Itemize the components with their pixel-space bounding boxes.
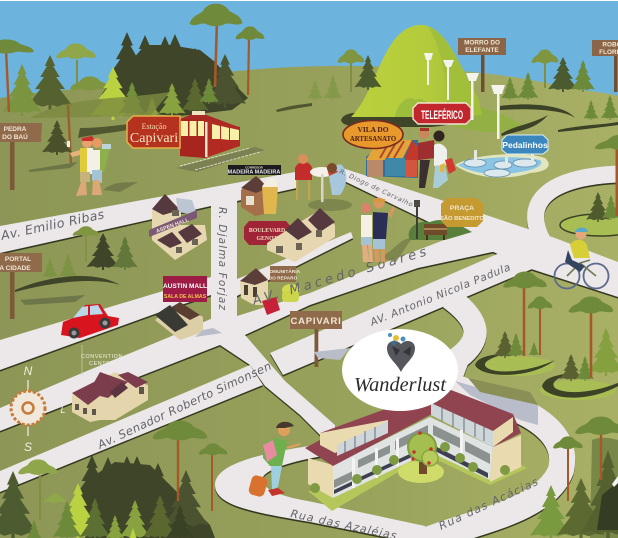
building: Comunitas (240, 266, 301, 315)
sign: Capivari: CAPIVARI (290, 316, 342, 327)
road label: Av. Antonio Nicola Padula: AV. Antonio Nicola Padula (368, 261, 512, 329)
sky (0, 1, 618, 121)
sign: Pedra do Baú (0, 123, 42, 190)
sign: Portal da Cidade: A CIDADE (0, 265, 31, 272)
sign: Teleférico: TELEFÉRICO (421, 107, 463, 122)
sign: Boulevard Genot: GENOT (257, 236, 278, 242)
compass rose: S (24, 440, 32, 454)
sign: Pedra do Baú: DO BAÚ (2, 132, 28, 141)
market stall: Vila do Artesanato (366, 140, 420, 178)
traveller with suitcase (248, 422, 300, 498)
far trees: top right (308, 49, 618, 136)
sign: Estação Capivari: Estação (142, 122, 166, 131)
roads (0, 165, 618, 538)
building: Aspen Hall (149, 194, 207, 260)
sign: Vila do Artesanato: ARTESANATO (350, 136, 396, 143)
green patch with lamp and bench (409, 200, 472, 240)
sign: Madeira Madeira: MADEIRA MADEIRA (228, 170, 280, 176)
forest: bottom right (530, 416, 618, 538)
sign: Pedalinhos (502, 135, 548, 154)
right hill with trees (560, 134, 618, 236)
icon: heart balloon (387, 333, 415, 372)
building: brick with beer mug (241, 176, 278, 216)
building: Comunitas: COMUNITÁRIA (266, 268, 301, 275)
logo: Wanderlust white ellipse (342, 329, 458, 411)
label: Convention Center (81, 345, 123, 375)
sign: Morro do Elefante: MORRO DO (464, 40, 500, 46)
sign: Vila do Artesanato (343, 120, 403, 148)
compass rose (11, 364, 66, 454)
hotel building (305, 390, 527, 511)
sign: Estação Capivari: Capivari (130, 131, 178, 146)
building: Convention Center (72, 372, 148, 422)
road label: Av. Macedo Soares: AV. Macedo Soares (250, 245, 428, 309)
forest: bottom left (0, 421, 227, 538)
couple taking a selfie (67, 136, 138, 196)
lake with pedal boats (455, 150, 549, 178)
small trees: between roads left (15, 226, 138, 305)
small fir with shadow (28, 105, 78, 172)
cyclist (554, 228, 608, 288)
sign: Pedra do Baú: PEDRA (4, 126, 27, 133)
label: Convention Center: CONVENTION (81, 354, 123, 360)
sign: Pedalinhos: Pedalinhos (502, 140, 548, 150)
compass rose: L (60, 405, 66, 415)
car (61, 304, 119, 338)
building: Austin Mall (155, 302, 222, 340)
sign: Praça São Benedito: SÃO BENEDITO (440, 215, 484, 222)
sign: Boulevard Genot: BOULEVARD (249, 228, 285, 234)
trees with rings: lower right (475, 271, 618, 400)
sign: Estação Capivari (127, 116, 180, 148)
couple with shopping bags (418, 128, 456, 188)
label: Convention Center: CENTER (89, 361, 115, 367)
courtyard tree (398, 431, 444, 483)
sign: Bosque da Floresta (592, 40, 618, 92)
building: Comunitas: DO REPARO (269, 276, 298, 282)
sign: Morro do Elefante (458, 38, 506, 92)
sign: Praça São Benedito (440, 198, 484, 227)
road label: R. Djalma Forjaz: R. Djalma Forjaz (216, 207, 228, 310)
sign: Boulevard Genot (244, 221, 291, 245)
road label: Rua das Acácias: Rua das Acácias (437, 475, 540, 533)
mountain: Morro do Elefante (341, 25, 521, 132)
hotel shadow (455, 378, 538, 425)
road label: Av. Senador Roberto Simonsen: Av. Senador Roberto Simonsen (94, 359, 273, 452)
sign: Portal da Cidade: PORTAL (5, 256, 31, 263)
couple waving (361, 198, 412, 262)
sign: Vila do Artesanato: VILA DO (357, 125, 389, 134)
sign: Morro do Elefante: ELEFANTE (465, 47, 499, 54)
sign: Teleférico (413, 103, 471, 124)
sign: Austin Mall: SALA DE ALMAS (164, 294, 207, 300)
building: boulevard houses (267, 208, 335, 262)
sign: Austin Mall (163, 276, 207, 302)
compass rose: N (24, 364, 33, 378)
road label: Av. Emilio Ribas: Av. Emilio Ribas (0, 206, 106, 243)
sign: Madeira Madeira (228, 165, 281, 176)
road label: R. Diogo de Carvalho: R. Diogo de Carvalho (338, 168, 414, 209)
sign: Capivari (290, 311, 350, 367)
sign: Praça São Benedito: PRAÇA (450, 205, 474, 212)
building: Aspen Hall: ASPEN HALL (155, 217, 191, 235)
logo wordmark: Wanderlust (354, 374, 446, 396)
tram: Estação Capivari (176, 111, 265, 172)
cafe table with people (295, 154, 352, 211)
sign: Madeira Madeira: CORREDOR (245, 166, 264, 170)
far trees and forest: top left (0, 4, 312, 138)
sign: Austin Mall: AUSTIN MALL (163, 283, 207, 290)
sign: Portal da Cidade (0, 253, 42, 319)
cable lift towers (424, 53, 505, 139)
